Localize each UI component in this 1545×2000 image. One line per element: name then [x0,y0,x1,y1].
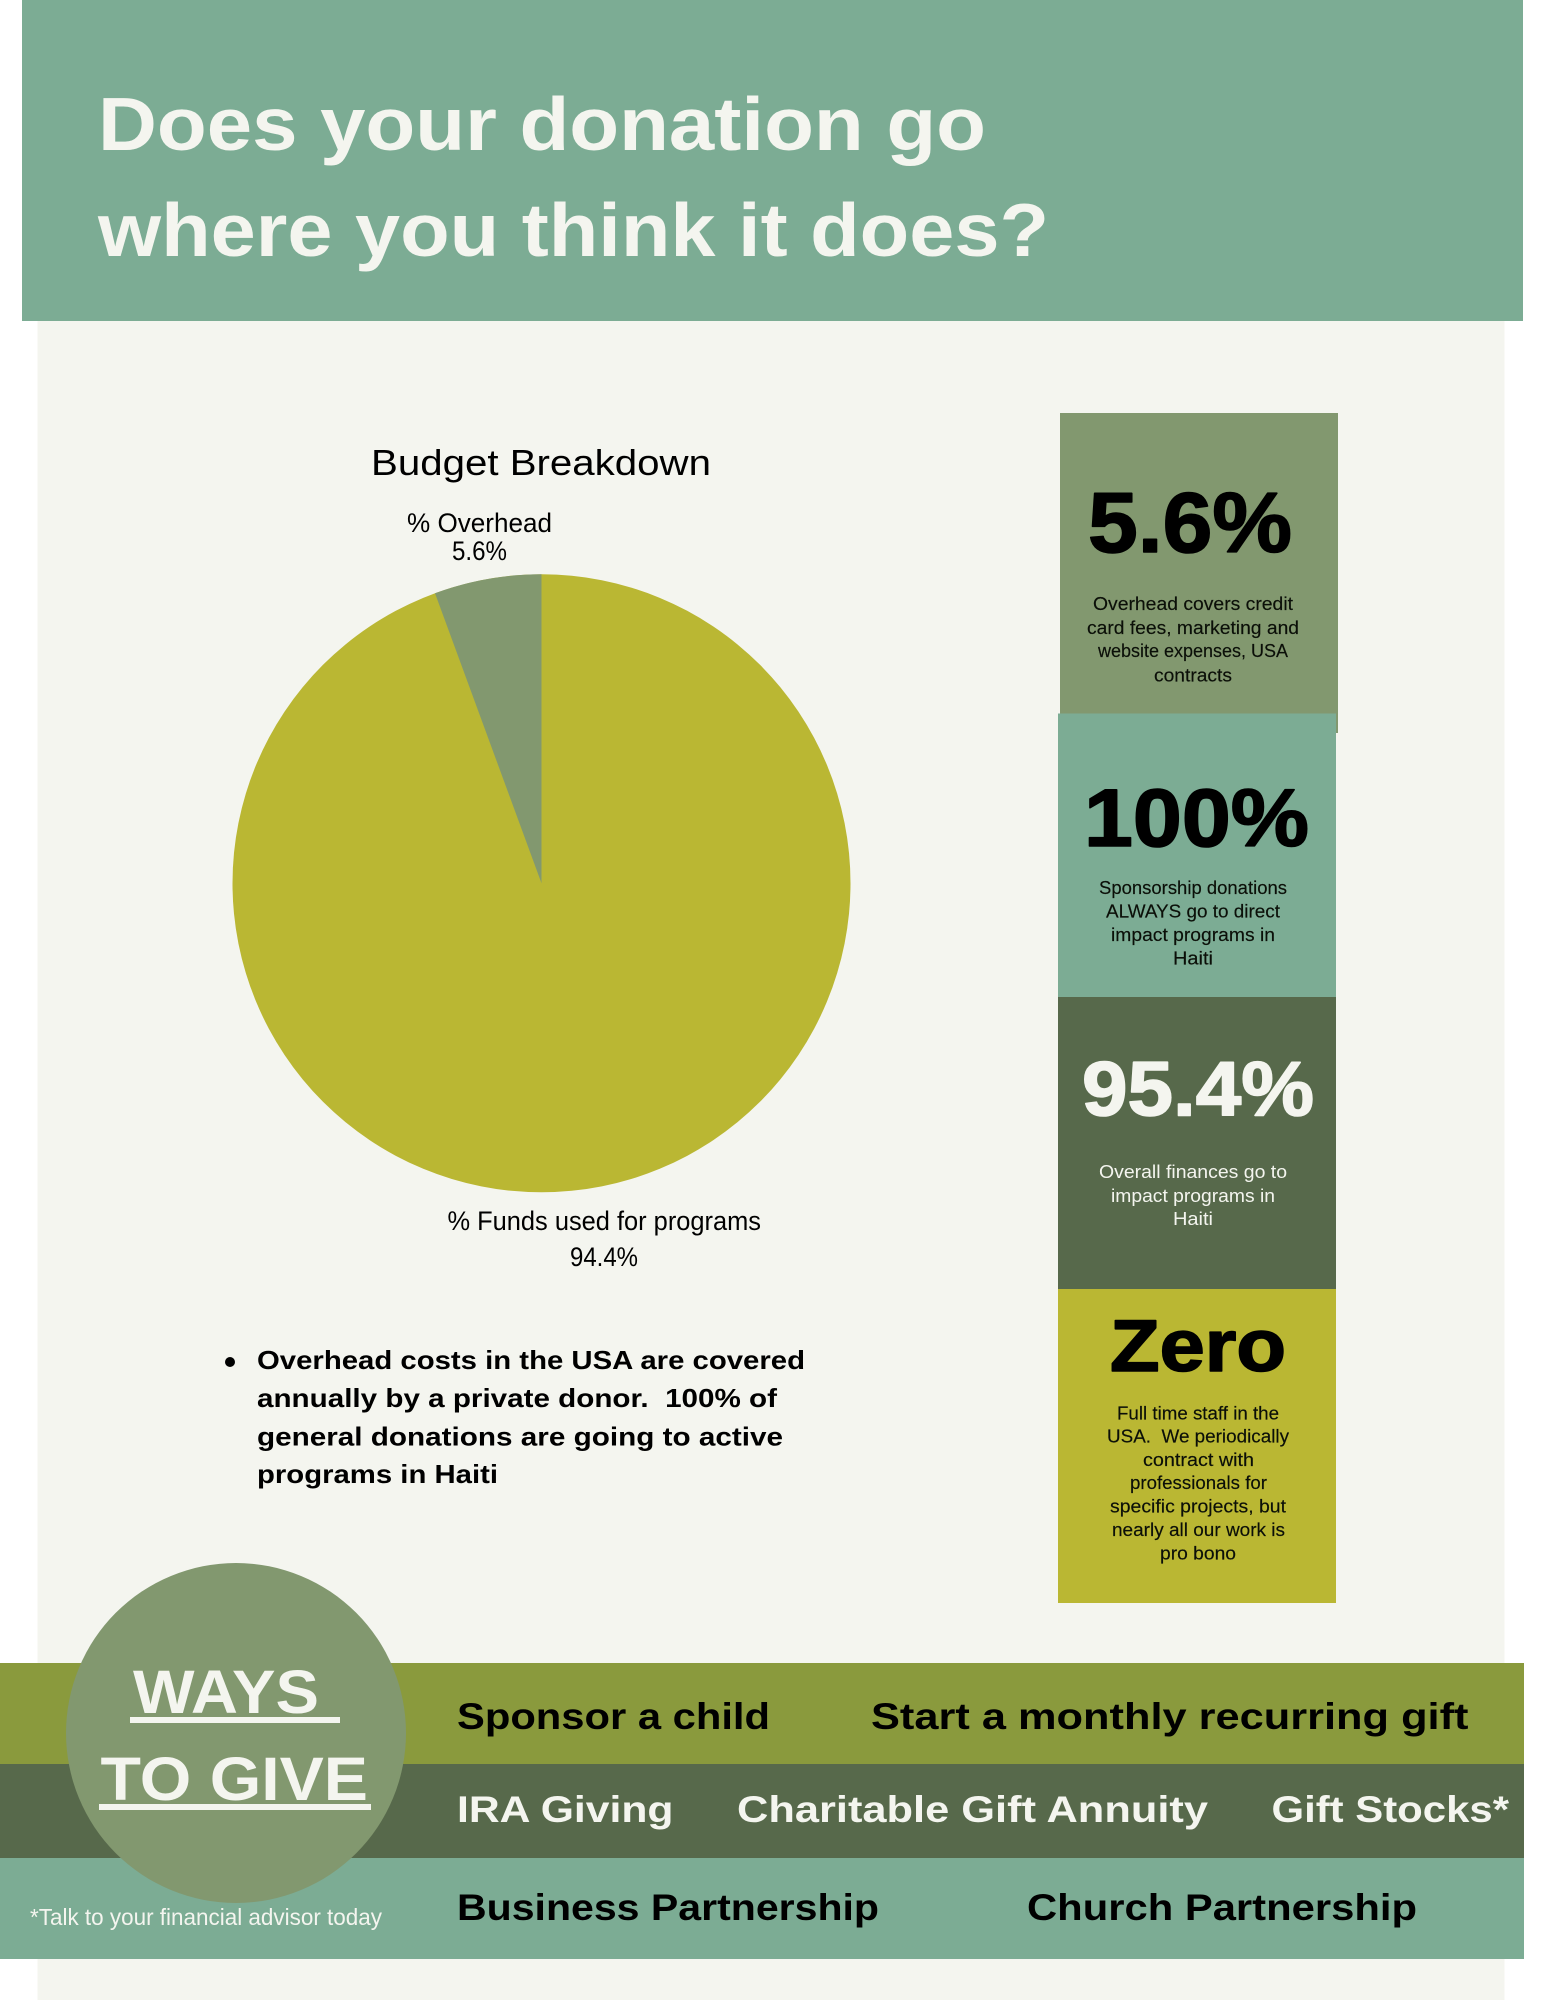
panel: budget pie chart [232,442,850,1272]
text block: overhead note [225,1345,805,1489]
stat description: contracts [1154,666,1232,686]
band: sponsor and monthly gift [0,1663,1524,1764]
stat description: Haiti [1173,948,1213,968]
stat word: Zero [1110,1306,1286,1387]
stat number: 5.6% [1088,476,1292,571]
banner background [22,0,1523,321]
stat description: impact programs in [1111,1186,1275,1206]
panel: 5.6% overhead stat [1060,413,1338,733]
footnote: *Talk to your financial advisor today [30,1904,382,1930]
band: partnerships: Church Partnership [1027,1887,1417,1928]
stat description: card fees, marketing and [1087,618,1299,638]
label: overhead [407,508,552,566]
stat description [1099,1162,1287,1229]
circle badge: ways to give [66,1563,406,1903]
stat description: Full time staff in the [1117,1404,1279,1424]
stat number: 95.4% [1082,1046,1314,1132]
label: funds used for programs: 94.4% [570,1242,638,1272]
stat description [1099,878,1287,968]
card background [1058,714,1336,998]
circle badge: ways to give: TO GIVE [100,1745,368,1813]
chart title: Budget Breakdown [371,442,711,483]
stat description: website expenses, USA [1097,641,1288,661]
band: IRA, annuity and stocks: IRA Giving [457,1789,674,1830]
note text: annually by a private donor. 100% of [257,1383,777,1413]
stat description: pro bono [1160,1544,1236,1564]
stat description: Overall finances go to [1099,1162,1287,1182]
card background [1058,997,1336,1289]
note text [257,1345,805,1489]
pie: funds used for programs [232,574,850,1192]
band: partnerships [0,1858,1524,1959]
panel: 100% sponsorship stat [1058,714,1336,998]
title: where you think it does? [97,188,1049,272]
stat number: 100% [1084,773,1309,864]
note text: Overhead costs in the USA are covered [257,1345,805,1375]
title: Does your donation go [98,82,986,166]
band: partnerships: Business Partnership [457,1887,879,1928]
band: IRA, annuity and stocks: Charitable Gift Annuity [737,1789,1208,1830]
panel: 95.4% finances stat [1058,997,1336,1289]
band: IRA, annuity and stocks [0,1764,1524,1858]
stat description: Overhead covers credit [1093,594,1293,614]
panel: ways to give [0,1563,1524,1959]
bullet [225,1357,235,1367]
card background [1058,1289,1336,1603]
stat description: professionals for [1130,1473,1267,1493]
band: sponsor and monthly gift: Sponsor a child [457,1696,770,1737]
stat description: USA. We periodically [1107,1426,1289,1446]
stat description: Haiti [1173,1209,1213,1229]
stat description: impact programs in [1111,925,1275,945]
note text: programs in Haiti [257,1459,498,1489]
label: funds used for programs: % Funds used for programs [448,1206,761,1236]
band: IRA, annuity and stocks: Gift Stocks* [1272,1789,1510,1830]
circle badge: ways to give: WAYS [133,1658,319,1726]
stat description [1107,1404,1289,1564]
stat description [1087,594,1299,686]
title banner [22,0,1523,321]
pie: overhead slice [435,574,542,883]
stat description: ALWAYS go to direct [1106,902,1280,922]
label: overhead: 5.6% [452,536,507,566]
panel: zero staff stat [1058,1289,1336,1603]
title [97,82,1049,272]
card background [1060,413,1338,733]
note text: general donations are going to active [257,1422,783,1452]
label: overhead: % Overhead [407,508,552,538]
label: funds used for programs [448,1206,761,1272]
band: sponsor and monthly gift: Start a monthly recurring gift [871,1696,1468,1737]
stat description: contract with [1143,1450,1254,1470]
stat description: specific projects, but [1110,1496,1286,1516]
stat description: nearly all our work is [1112,1520,1285,1540]
stat description: Sponsorship donations [1099,878,1287,898]
